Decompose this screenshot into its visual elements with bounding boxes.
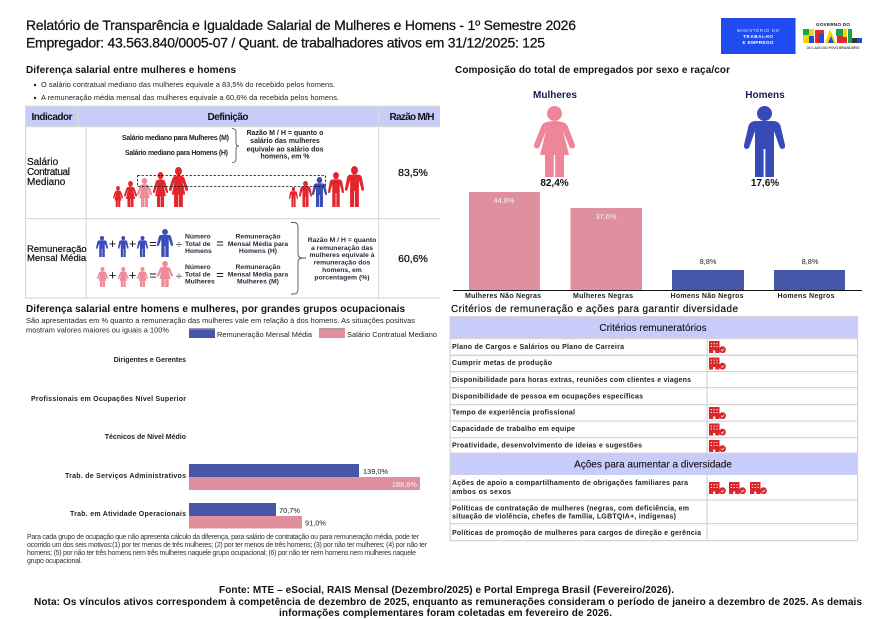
note: grupo ocupacional. [27,558,82,565]
icon: mulheres [533,90,577,189]
fórmula mulheres: Mulheres [185,278,215,286]
icon: soma mulheres: ÷ [176,270,182,282]
bar chart: grupos ocupacionais: Profissionais em Ocupações Nível Superior [31,396,186,403]
definição razão: equivale ao salário dos [246,146,324,154]
icon: brace [291,222,306,294]
bullet list [34,80,339,102]
bar chart: raça/cor [453,192,862,300]
description [26,316,415,334]
row: remuneração mensal média: Mensal Média [27,253,87,264]
row: salário contratual mediano [27,128,428,207]
row: salário contratual mediano: Salário mediano para Mulheres (M) [122,135,229,142]
row: salário contratual mediano: 83,5% [398,167,428,179]
bar chart: grupos ocupacionais: Trab. em Atividade Operacionais [70,511,186,518]
definição razão: homens, em [322,267,362,274]
action rows: ambos os sexos [452,489,511,496]
icon: homens: Homens [745,90,785,101]
fórmula mulheres: Número [185,264,211,271]
panel: composição do total de empregados [453,65,862,300]
note [27,534,428,565]
action rows [452,480,701,537]
row: remuneração mensal média: Remuneração [27,244,87,255]
panel: critérios de remuneração [450,304,858,541]
action rows: Políticas de contratação de mulheres (negras, com deficiência, em [452,506,689,512]
fórmula mulheres: = [216,267,224,282]
fórmula mulheres: Remuneração [236,264,280,271]
bar chart: raça/cor: Homens Não Negros [670,293,744,300]
logo: Ministério do Trabalho e Emprego: TRABALHO [743,34,773,39]
title: Relatório de Transparência e Igualdade Salarial de Mulheres e Homens - 1º Semestre 2026 [26,17,576,33]
action rows: Ações de apoio a compartilhamento de obrigações familiares para [452,480,688,487]
fórmula homens: = [216,236,224,250]
fórmula mulheres: Mensal Média para [228,272,288,278]
definição razão: salário das mulheres [250,138,320,145]
footer: fonte e nota: Fonte: MTE – eSocial, RAIS Mensal (Dezembro/2025) e Portal Emprega Brasil (Fevereiro/2026). [219,585,674,596]
bar chart: raça/cor: Mulheres Não Negras [465,293,541,300]
icon: homens: 17,6% [751,178,779,189]
fórmula homens: Mensal Média para [228,241,288,248]
row: salário contratual mediano: Salário mediano para Homens (H) [125,150,228,157]
icon: soma mulheres: + [129,268,136,282]
definição razão: a remuneração das [311,245,373,252]
fórmula mulheres: Total de [185,272,211,278]
row: salário contratual mediano: Contratual [27,167,70,178]
row: salário contratual mediano: Salário [27,157,59,168]
icon: soma mulheres: = [149,268,157,282]
description: mostram valores maiores ou iguais a 100% [26,326,169,334]
fórmula homens: Homens (H) [239,248,277,255]
logo: Governo do Brasil [803,22,862,50]
note: ocorrido um dos seis motivos:(1) por ter menos de três mulheres; (2) por ter menos de três homens; (3) por não ter mulheres; (4) por não ter [27,542,428,549]
footer: fonte e nota: informações complementares foram coletadas em fevereiro de 2026. [279,608,612,619]
footer: fonte e nota: Nota: Os vínculos ativos correspondem à competência de dezembro de 2025, enquanto as remunerações consideram o período de janeiro a dezembro de 2025. As demais [34,597,862,608]
criteria rows: Proatividade, desenvolvimento de ideias e sugestões [452,442,642,450]
criteria rows: Capacidade de trabalho em equipe [452,426,575,433]
bar chart: grupos ocupacionais: 188,6% [392,480,417,489]
icon: empresas [709,482,767,494]
title [26,17,576,50]
fórmula homens [185,234,288,255]
row: salário contratual mediano: Mediano [27,177,66,188]
header: critérios remuneratórios: Critérios remuneratórios [599,323,707,334]
icon: grupo de mulheres [113,167,188,207]
logo: Governo do Brasil: DO LADO DO POVO BRASILEIRO [806,46,860,50]
bar chart: grupos ocupacionais: Dirigentes e Gerentes [114,357,186,364]
icon: soma homens: ÷ [176,239,182,251]
definição razão: Razão M / H = quanto o [247,130,323,137]
bar chart: raça/cor: 44,8% [494,196,515,205]
table header: Razão M/H [390,112,434,123]
icon: soma homens: + [109,236,116,251]
fórmula mulheres [185,264,288,286]
fórmula homens: Remuneração [236,234,280,240]
criteria rows: Cumprir metas de produção [452,360,552,367]
definição razão: mulheres equivale à [310,252,375,259]
icon: soma homens [96,229,182,257]
logo: Ministério do Trabalho e Emprego: MINISTÉRIO DO [737,28,780,33]
table header: Definição [208,112,248,123]
heading: Composição do total de empregados por sexo e raça/cor [455,65,730,76]
fórmula homens: Homens [185,248,212,255]
dashed highlight [138,176,326,186]
definição razão: Razão M / H = quanto [308,237,376,244]
fórmula homens: Número [185,234,211,240]
bar chart: grupos ocupacionais: 91,0% [305,518,326,528]
table: indicadores [25,106,440,299]
action rows: Políticas de promoção de mulheres para cargos de direção e gerência [452,530,701,537]
definição razão: homens, em % [260,154,310,160]
legend: Salário Contratual Mediano [347,330,437,339]
action rows: situação de violência, chefes de família, LGBTQIA+, indígenas) [452,514,676,520]
heading: Critérios de remuneração e ações para garantir diversidade [451,304,738,315]
icon: soma homens: + [129,236,136,251]
definição razão [246,130,324,160]
icon: brace [232,128,239,162]
criteria rows: Disponibilidade para horas extras, reuniões com clientes e viagens [452,377,691,384]
bar chart: grupos ocupacionais: Trab. de Serviços Administrativos [65,473,186,480]
bar chart: grupos ocupacionais [31,357,420,528]
footer: fonte e nota [34,585,862,619]
header: ações para aumentar a diversidade: Ações para aumentar a diversidade [574,460,732,470]
fórmula homens: Total de [185,241,211,248]
definição razão [308,237,376,282]
icon: empresas [709,341,726,452]
note: Para cada grupo de ocupação que não apresenta cálculo da diferença, para salário de contratação ou para remuneração média, pode ter [27,534,420,541]
logo: Governo do Brasil: GOVERNO DO [816,22,850,27]
panel: diferença salarial por grupos ocupacionais [26,304,437,565]
bar chart: raça/cor: 8,8% [700,257,717,266]
fórmula mulheres: Mulheres (M) [237,278,279,286]
criteria rows [452,344,691,450]
legend: Remuneração Mensal Média [217,330,313,339]
legend [189,328,437,339]
bullet list: O salário contratual mediano das mulheres equivale a 83,5% do recebido pelos homens. [41,80,335,89]
bar chart: grupos ocupacionais: Técnicos de Nível Médio [105,434,186,441]
table header [32,112,434,123]
logo: Ministério do Trabalho e Emprego: E EMPREGO [742,40,774,45]
table header: Indicador [32,112,73,123]
description: São apresentadas em % quanto a remuneração das mulheres vale em relação à dos homens. As situações positivas [26,316,415,325]
logo: Ministério do Trabalho e Emprego [721,18,796,54]
icon: homens [744,90,785,189]
heading: Diferença salarial entre homens e mulheres, por grandes grupos ocupacionais [26,304,405,315]
definição razão: porcentagem (%) [314,274,370,282]
panel: diferença salarial entre mulheres e homens [25,65,440,299]
icon: soma mulheres: + [109,268,116,282]
title: Empregador: 43.563.840/0005-07 / Quant. de trabalhadores ativos em 31/12/2025: 125 [26,34,545,50]
icon: mulheres: Mulheres [533,90,577,101]
bar chart: raça/cor: 8,8% [802,257,819,266]
icon: grupo de homens [289,166,364,207]
bar chart: raça/cor: Mulheres Negras [573,293,633,300]
definição razão: remuneração dos [314,260,371,266]
table: critérios [450,316,858,541]
icon: soma mulheres [97,261,182,287]
heading: Diferença salarial entre mulheres e homens [26,65,236,76]
criteria rows: Disponibilidade de pessoa em ocupações específicas [452,394,643,400]
criteria rows: Tempo de experiência profissional [452,410,575,416]
bar chart: grupos ocupacionais: 139,0% [363,467,388,476]
note: homens; (5) por não ter três homens nem três mulheres naquele grupo ocupacional; (6) por não ter nem homens nem mulheres naquele [27,550,416,557]
criteria rows: Plano de Cargos e Salários ou Plano de Carreira [452,344,624,351]
row: remuneração mensal média [27,222,428,294]
bar chart: grupos ocupacionais: 70,7% [279,506,300,515]
row: remuneração mensal média: 60,6% [398,253,428,265]
icon: mulheres: 82,4% [540,178,569,189]
bullet list: A remuneração média mensal das mulheres equivale a 60,6% da recebida pelos homens. [41,93,339,102]
bar chart: raça/cor: Homens Negros [778,293,835,300]
icon: soma homens: = [149,236,157,251]
bar chart: raça/cor: 37,6% [596,212,617,221]
